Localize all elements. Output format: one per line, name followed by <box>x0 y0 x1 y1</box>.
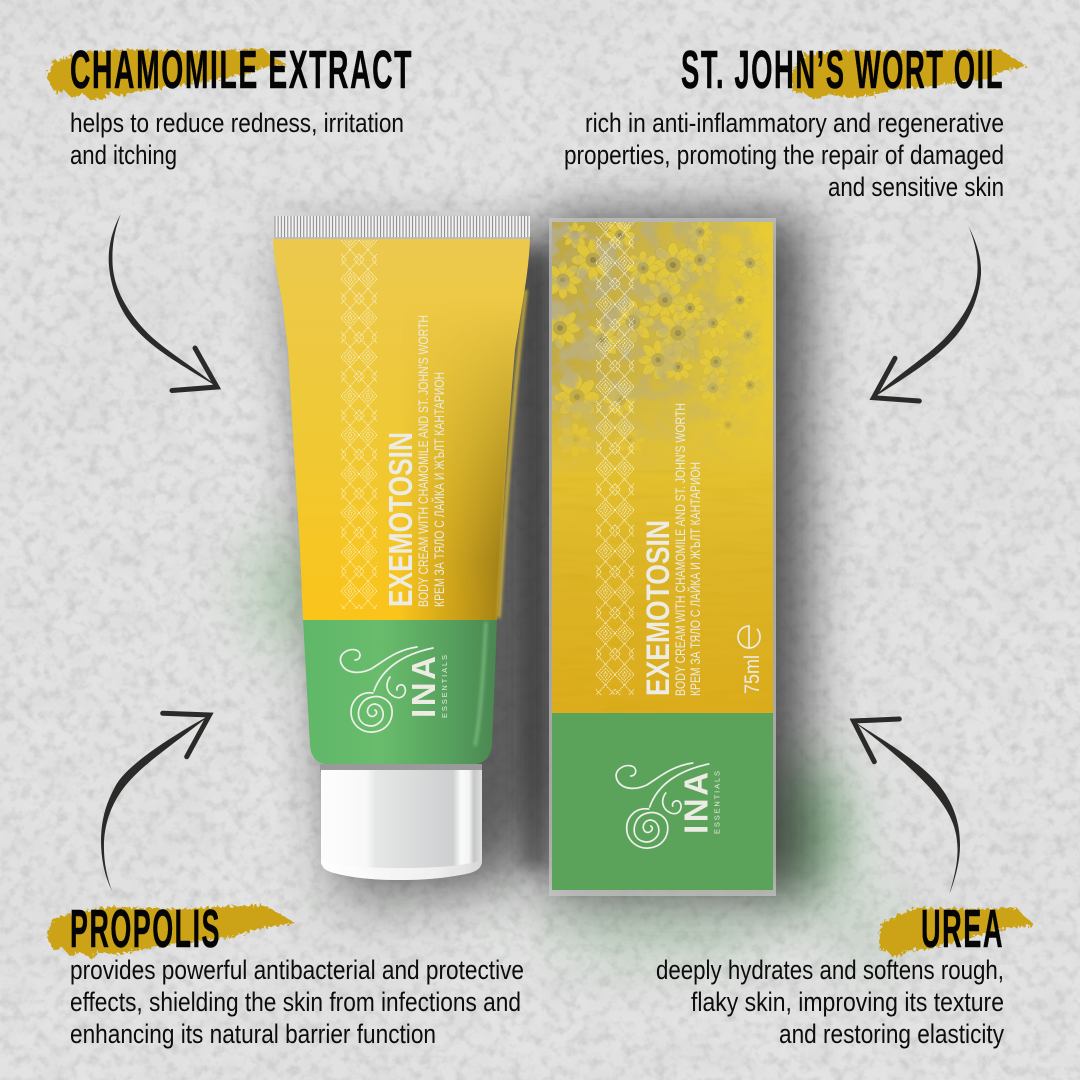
text: st john's wort description: properties, promoting the repair of damaged <box>564 140 1004 170</box>
tube product name: EXEMOTOSIN <box>382 432 419 607</box>
arrow: top left <box>109 214 218 390</box>
text: chamomile description <box>70 108 404 170</box>
logo swirl <box>340 647 433 732</box>
box yellow panel <box>552 222 773 713</box>
infographic canvas: PROPOLIS <box>70 899 221 959</box>
icon: estimated sign <box>738 626 760 648</box>
arrow: bottom right <box>853 719 960 894</box>
brush stroke: chamomile <box>47 48 287 100</box>
logo wordmark INA: INA <box>405 656 442 718</box>
tube bulgarian subtitle: КРЕМ ЗА ТЯЛО С ЛАЙКА И ЖЪЛТ КАНТАРИОН <box>430 372 447 607</box>
brush stroke: urea <box>879 908 1035 958</box>
tube white cap <box>321 770 482 880</box>
tube crimp seal <box>274 216 530 239</box>
logo essentials: ESSENTIALS <box>713 771 722 834</box>
box frame <box>549 218 776 896</box>
box bulgarian subtitle: КРЕМ ЗА ТЯЛО С ЛАЙКА И ЖЪЛТ КАНТАРИОН <box>686 462 703 696</box>
text: st john's wort description: and sensitive skin <box>828 172 1004 202</box>
tube english subtitle: BODY CREAM WITH CHAMOMILE AND ST. JOHN'S WORTH <box>415 315 431 607</box>
logo wordmark INA: INA <box>678 772 715 834</box>
box english subtitle: BODY CREAM WITH CHAMOMILE AND ST. JOHN'S WORTH <box>672 403 688 696</box>
arrow: bottom left <box>101 713 210 892</box>
box flower photo <box>539 219 773 472</box>
tube folk pattern <box>341 240 377 609</box>
logo swirl <box>616 763 709 848</box>
arrow: top right <box>873 226 981 401</box>
text: chamomile description: helps to reduce redness, irritation <box>70 108 404 138</box>
product: cream tube <box>273 216 530 880</box>
box INA logo <box>616 763 722 848</box>
text: urea description: deeply hydrates and softens rough, <box>656 955 1004 985</box>
box folk pattern <box>596 222 634 695</box>
text: urea description: and restoring elasticity <box>779 1019 1005 1049</box>
box green panel <box>552 713 773 890</box>
text: urea description: flaky skin, improving its texture <box>691 987 1004 1017</box>
drop shadow: tube and box <box>292 216 806 896</box>
text: chamomile description: and itching <box>70 140 177 170</box>
text: propolis description: provides powerful antibacterial and protective <box>70 955 524 985</box>
text: st john's wort description: rich in anti-inflammatory and regenerative <box>585 108 1004 138</box>
tube neck <box>320 764 482 772</box>
tube yellow body <box>273 239 530 620</box>
text: propolis description: effects, shielding the skin from infections and <box>70 987 521 1017</box>
text: propolis description <box>70 955 524 1049</box>
product: carton box <box>539 218 776 896</box>
brush stroke: st john's wort <box>791 49 1027 99</box>
green glow behind products <box>257 530 910 960</box>
heading: chamomile extract: CHAMOMILE EXTRACT <box>70 40 413 100</box>
text: propolis description: enhancing its natural barrier function <box>70 1019 436 1049</box>
box paper texture <box>552 470 773 713</box>
box product name: EXEMOTOSIN <box>640 520 676 696</box>
text: st john's wort description <box>564 108 1004 202</box>
text: urea description <box>656 955 1005 1049</box>
box volume: 75ml <box>741 655 764 694</box>
tube INA logo <box>340 647 449 732</box>
tube green base <box>303 620 497 764</box>
logo essentials: ESSENTIALS <box>440 655 449 718</box>
brush stroke: propolis <box>47 905 295 958</box>
